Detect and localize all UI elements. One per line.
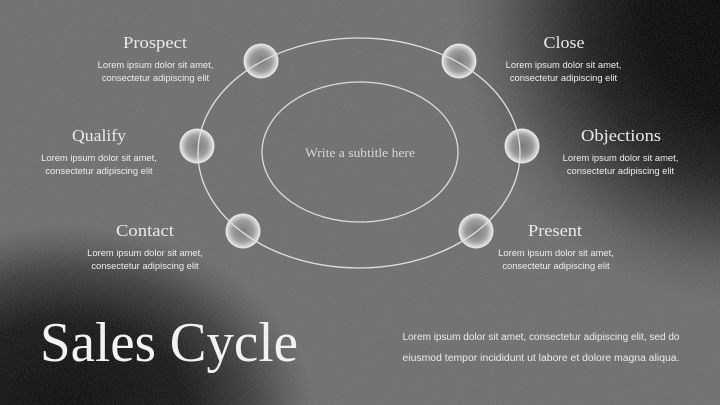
label: prospect: consectetur adipiscing elit [102,72,210,83]
label: present [498,221,614,271]
label: present: Lorem ipsum dolor sit amet, [498,247,614,258]
label: close [506,33,621,83]
label: contact: Contact [116,221,174,240]
label: prospect [98,33,213,83]
label: qualify: consectetur adipiscing elit [45,165,153,176]
diagram: sales cycle orbit [180,38,540,268]
description text block: eiusmod tempor incididunt ut labore et dolore magna aliqua. [402,353,680,364]
label: contact [87,221,203,271]
label: objections: Objections [581,126,661,145]
center subtitle: Write a subtitle here [305,145,415,160]
title: Sales Cycle [40,312,298,374]
label: present: Present [528,221,582,240]
node: close [442,44,476,78]
outer orbit ellipse [198,38,520,268]
label: qualify: Lorem ipsum dolor sit amet, [41,152,157,163]
label: contact: consectetur adipiscing elit [91,260,199,271]
inner orbit ellipse [262,82,458,222]
node: objections [504,128,540,164]
label: objections [563,126,678,176]
label: qualify [41,126,157,176]
node: present [458,214,494,248]
label: prospect: Prospect [123,33,187,52]
description text block [402,332,680,364]
node: contact [226,214,260,248]
label: close: Lorem ipsum dolor sit amet, [506,59,621,70]
label: close: Close [544,33,584,52]
label: close: consectetur adipiscing elit [510,72,618,83]
node: qualify [180,128,214,164]
node: prospect [244,44,278,78]
label: present: consectetur adipiscing elit [502,260,610,271]
label: objections: consectetur adipiscing elit [567,165,675,176]
description text block: Lorem ipsum dolor sit amet, consectetur adipiscing elit, sed do [402,332,680,343]
label: objections: Lorem ipsum dolor sit amet, [563,152,678,163]
label: contact: Lorem ipsum dolor sit amet, [87,247,203,258]
label: qualify: Qualify [72,126,127,145]
label: prospect: Lorem ipsum dolor sit amet, [98,59,213,70]
